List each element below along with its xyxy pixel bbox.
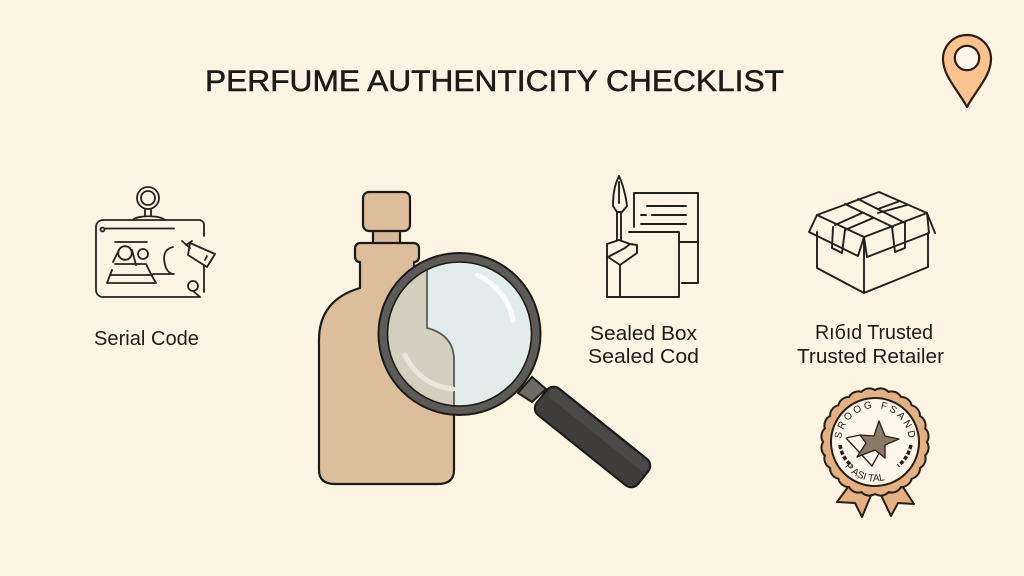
- illustration: perfume bottle under magnifier: [319, 192, 654, 491]
- label: trusted retailer: Rıбıd Trusted: [815, 322, 933, 344]
- perfume bottle: [319, 192, 454, 484]
- icon: serial code card: [96, 187, 215, 297]
- seal ring text: SROOG FSAND: [834, 402, 915, 438]
- label: trusted retailer: [797, 322, 944, 368]
- panel: trusted retailer: [797, 192, 944, 368]
- seal ring text: [834, 402, 915, 482]
- label: trusted retailer: Trusted Retailer: [797, 346, 944, 368]
- laurel leaves: [840, 445, 911, 466]
- icon: sealed box and document: [607, 176, 698, 297]
- ribbon tails: [837, 487, 914, 517]
- inner disc: [831, 398, 919, 486]
- magnifying glass handle: [518, 377, 654, 491]
- label: sealed box: Sealed Cod: [588, 346, 699, 368]
- panel: serial code: [94, 187, 215, 350]
- seal ring text: P ASI TAL: [845, 463, 885, 482]
- title: PERFUME AUTHENTICITY CHECKLIST: [205, 65, 784, 98]
- star emblem: [846, 421, 899, 466]
- icon: authenticity seal badge: [820, 387, 930, 518]
- icon: taped cardboard box: [809, 192, 935, 293]
- label: sealed box: Sealed Box: [590, 323, 697, 345]
- label: serial code: Serial Code: [94, 328, 199, 350]
- magnifying glass lens: [378, 253, 540, 420]
- icon: location pin: [943, 35, 991, 107]
- label: sealed box: [588, 323, 699, 368]
- scalloped edge: [821, 388, 929, 496]
- panel: sealed box: [588, 176, 699, 368]
